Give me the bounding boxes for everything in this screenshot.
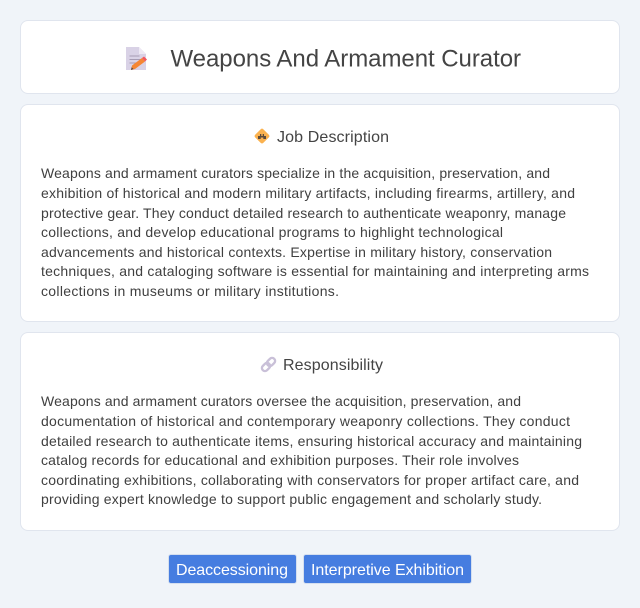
heading: job description: Job Description bbox=[277, 129, 389, 146]
text block: responsibility: catalog records for educational and exhibition purposes. Their role involves bbox=[41, 452, 519, 468]
text block: job description bbox=[41, 165, 589, 299]
tag: interpretive exhibition bbox=[303, 554, 472, 584]
tag: deaccessioning: Deaccessioning bbox=[176, 562, 288, 579]
text block: job description: advancements and historical contexts. Expertise in military history, conservation bbox=[41, 244, 552, 260]
text block: responsibility bbox=[41, 393, 582, 507]
text block: job description: exhibition of historical and modern military artifacts, including firearms, artillery, and bbox=[41, 185, 575, 201]
text block: responsibility: coordinating exhibitions, collaborating with conservators for proper artifact care, and bbox=[41, 472, 579, 488]
tag: interpretive exhibition: Interpretive Exhibition bbox=[311, 562, 464, 579]
text block: job description: collections, and develop educational programs to highlight technological bbox=[41, 224, 503, 240]
panel: job description bbox=[20, 104, 620, 322]
panel: title card bbox=[20, 20, 620, 94]
title: Weapons And Armament Curator bbox=[170, 46, 521, 72]
heading: responsibility: Responsibility bbox=[283, 357, 383, 374]
text block: job description: techniques, and cataloging software is essential for maintaining and interpreting arms bbox=[41, 263, 589, 279]
panel: responsibility bbox=[20, 332, 620, 531]
text block: responsibility: detailed research to authenticate items, ensuring historical accuracy and maintaining bbox=[41, 433, 582, 449]
text block: job description: protective gear. They conduct detailed research to authenticate weaponry, manage bbox=[41, 205, 566, 221]
text block: responsibility: providing expert knowledge to support public engagement and scholarly study. bbox=[41, 491, 542, 507]
text block: job description: Weapons and armament curators specialize in the acquisition, preservation, and bbox=[41, 165, 550, 181]
text block: responsibility: documentation of historical and contemporary weaponry collections. They conduct bbox=[41, 413, 570, 429]
text block: job description: collections in museums or military institutions. bbox=[41, 283, 339, 299]
text block: responsibility: Weapons and armament curators oversee the acquisition, preservation, and bbox=[41, 393, 521, 409]
tag: deaccessioning bbox=[168, 554, 297, 584]
icon: orange diamond bbox=[254, 128, 270, 144]
icon: chain link bbox=[261, 357, 276, 372]
icon: document with pencil bbox=[126, 47, 147, 70]
